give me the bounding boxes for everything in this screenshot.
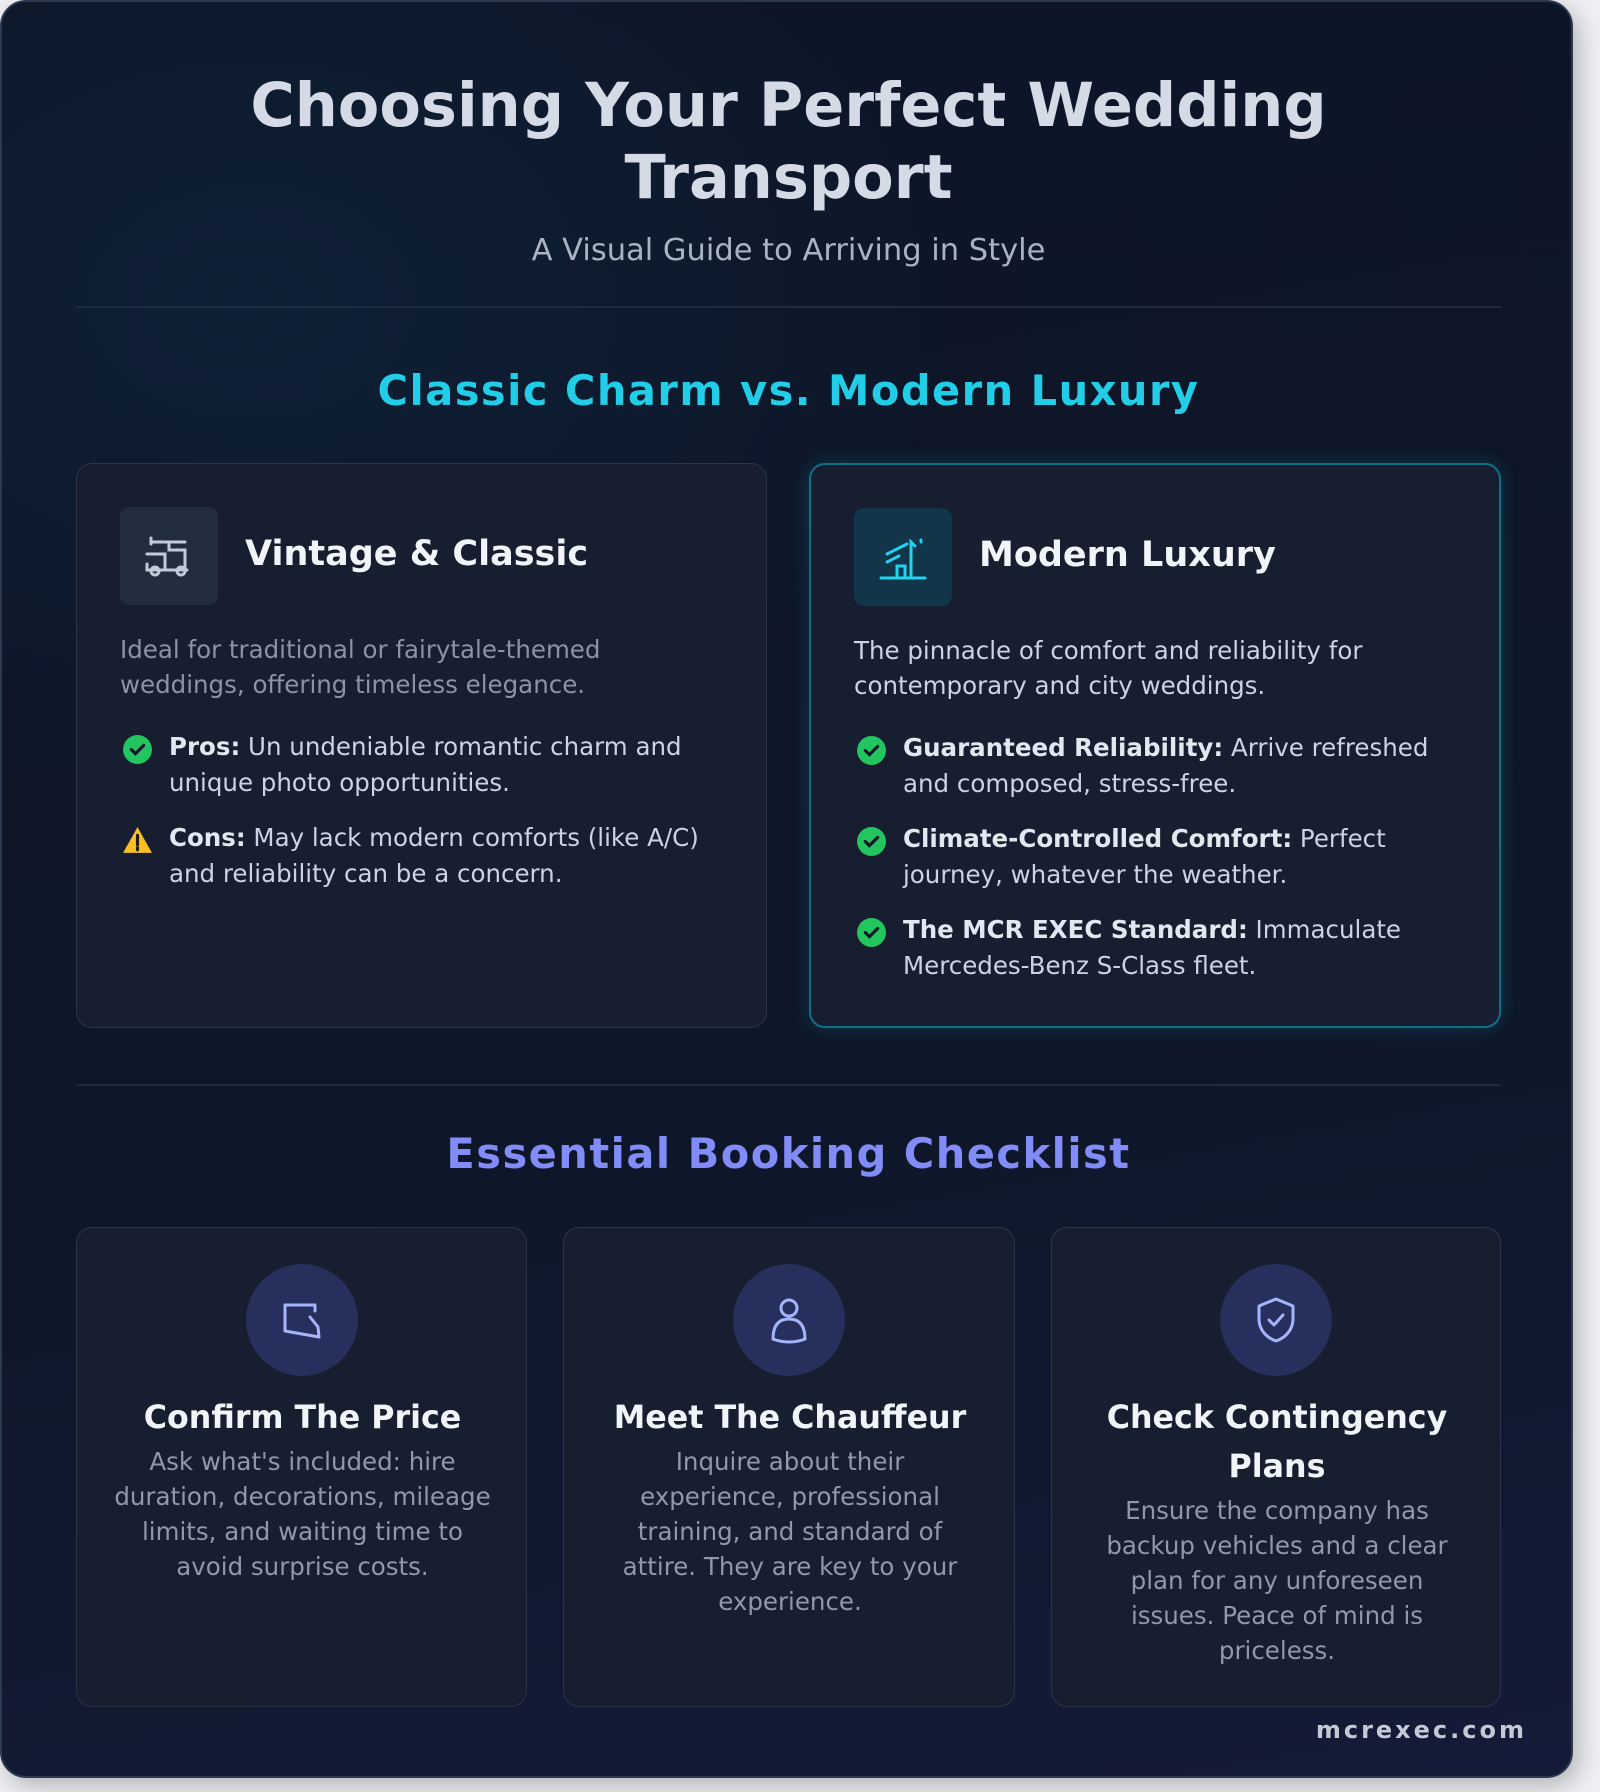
icon: check [857,918,886,947]
icon: ticket [246,1264,358,1376]
description: Ensure the company has [1125,1496,1429,1525]
footer brand: mcrexec.com [1316,1716,1527,1744]
icon: check [857,736,886,765]
bullet: climate [857,824,1386,888]
bullet: pros: Pros: Un undeniable romantic charm and [169,732,682,761]
panel: confirm price [76,1227,527,1707]
description: avoid surprise costs. [176,1552,429,1581]
description: The pinnacle of comfort and reliability for [854,636,1362,665]
icon: person [733,1264,845,1376]
description: duration, decorations, mileage [114,1482,491,1511]
card title: Vintage & Classic [245,534,588,574]
description: issues. Peace of mind is [1131,1601,1423,1630]
subtitle: A Visual Guide to Arriving in Style [532,233,1045,268]
bullet: climate: Climate-Controlled Comfort: Perfect [903,824,1386,853]
bullet: climate: journey, whatever the weather. [903,860,1287,888]
description: training, and standard of [638,1517,942,1546]
description: plan for any unforeseen [1131,1566,1423,1595]
bullet: cons: Cons: May lack modern comforts (like A/C) [169,823,699,852]
bullet: reliability: Guaranteed Reliability: Arrive refreshed [903,733,1428,762]
description [114,1447,491,1581]
description: Inquire about their [676,1447,904,1476]
card title: Modern Luxury [979,535,1276,575]
card title: Confirm The Price [144,1400,461,1436]
card title [1107,1400,1447,1485]
icon: shield [1220,1264,1332,1376]
bullet: reliability: and composed, stress-free. [903,768,1236,798]
heading: comparison: Classic Charm vs. Modern Luxury [378,366,1199,415]
panel: vintage [76,463,767,1028]
heading: checklist: Essential Booking Checklist [446,1129,1131,1178]
card title: Meet The Chauffeur [614,1400,966,1436]
bullet: standard [857,915,1401,980]
icon: check [123,735,152,764]
title: Choosing Your Perfect Wedding [250,71,1327,141]
bullet: reliability [857,733,1428,798]
card title: Check Contingency [1107,1400,1447,1436]
bullet: pros [123,732,682,796]
bullet: standard: The MCR EXEC Standard: Immaculate [903,915,1401,944]
bullet: cons [123,823,699,888]
title [250,71,1327,213]
description [854,636,1362,700]
card title: Plans [1229,1449,1325,1485]
bullet: pros: unique photo opportunities. [169,768,510,796]
description: weddings, offering timeless elegance. [120,670,585,699]
icon: modern city [854,508,952,606]
description: priceless. [1219,1636,1335,1665]
icon: vintage car [120,507,218,605]
panel: chauffeur [563,1227,1015,1707]
description: Ask what's included: hire [149,1447,456,1476]
icon: warning [123,827,152,853]
bullet: cons: and reliability can be a concern. [169,858,562,888]
description [120,635,600,699]
description: contemporary and city weddings. [854,671,1265,700]
description [623,1447,958,1616]
description: attire. They are key to your [623,1552,957,1581]
bullet: standard: Mercedes-Benz S-Class fleet. [903,950,1256,980]
description: experience. [718,1587,862,1616]
title: Transport [624,143,952,213]
panel: contingency [1051,1227,1501,1707]
icon: check [857,827,886,856]
description: experience, professional [640,1482,940,1511]
panel: modern [809,463,1501,1028]
description: limits, and waiting time to [142,1517,463,1546]
description: Ideal for traditional or fairytale-themed [120,635,600,664]
description: backup vehicles and a clear [1106,1531,1448,1560]
description [1106,1496,1448,1665]
